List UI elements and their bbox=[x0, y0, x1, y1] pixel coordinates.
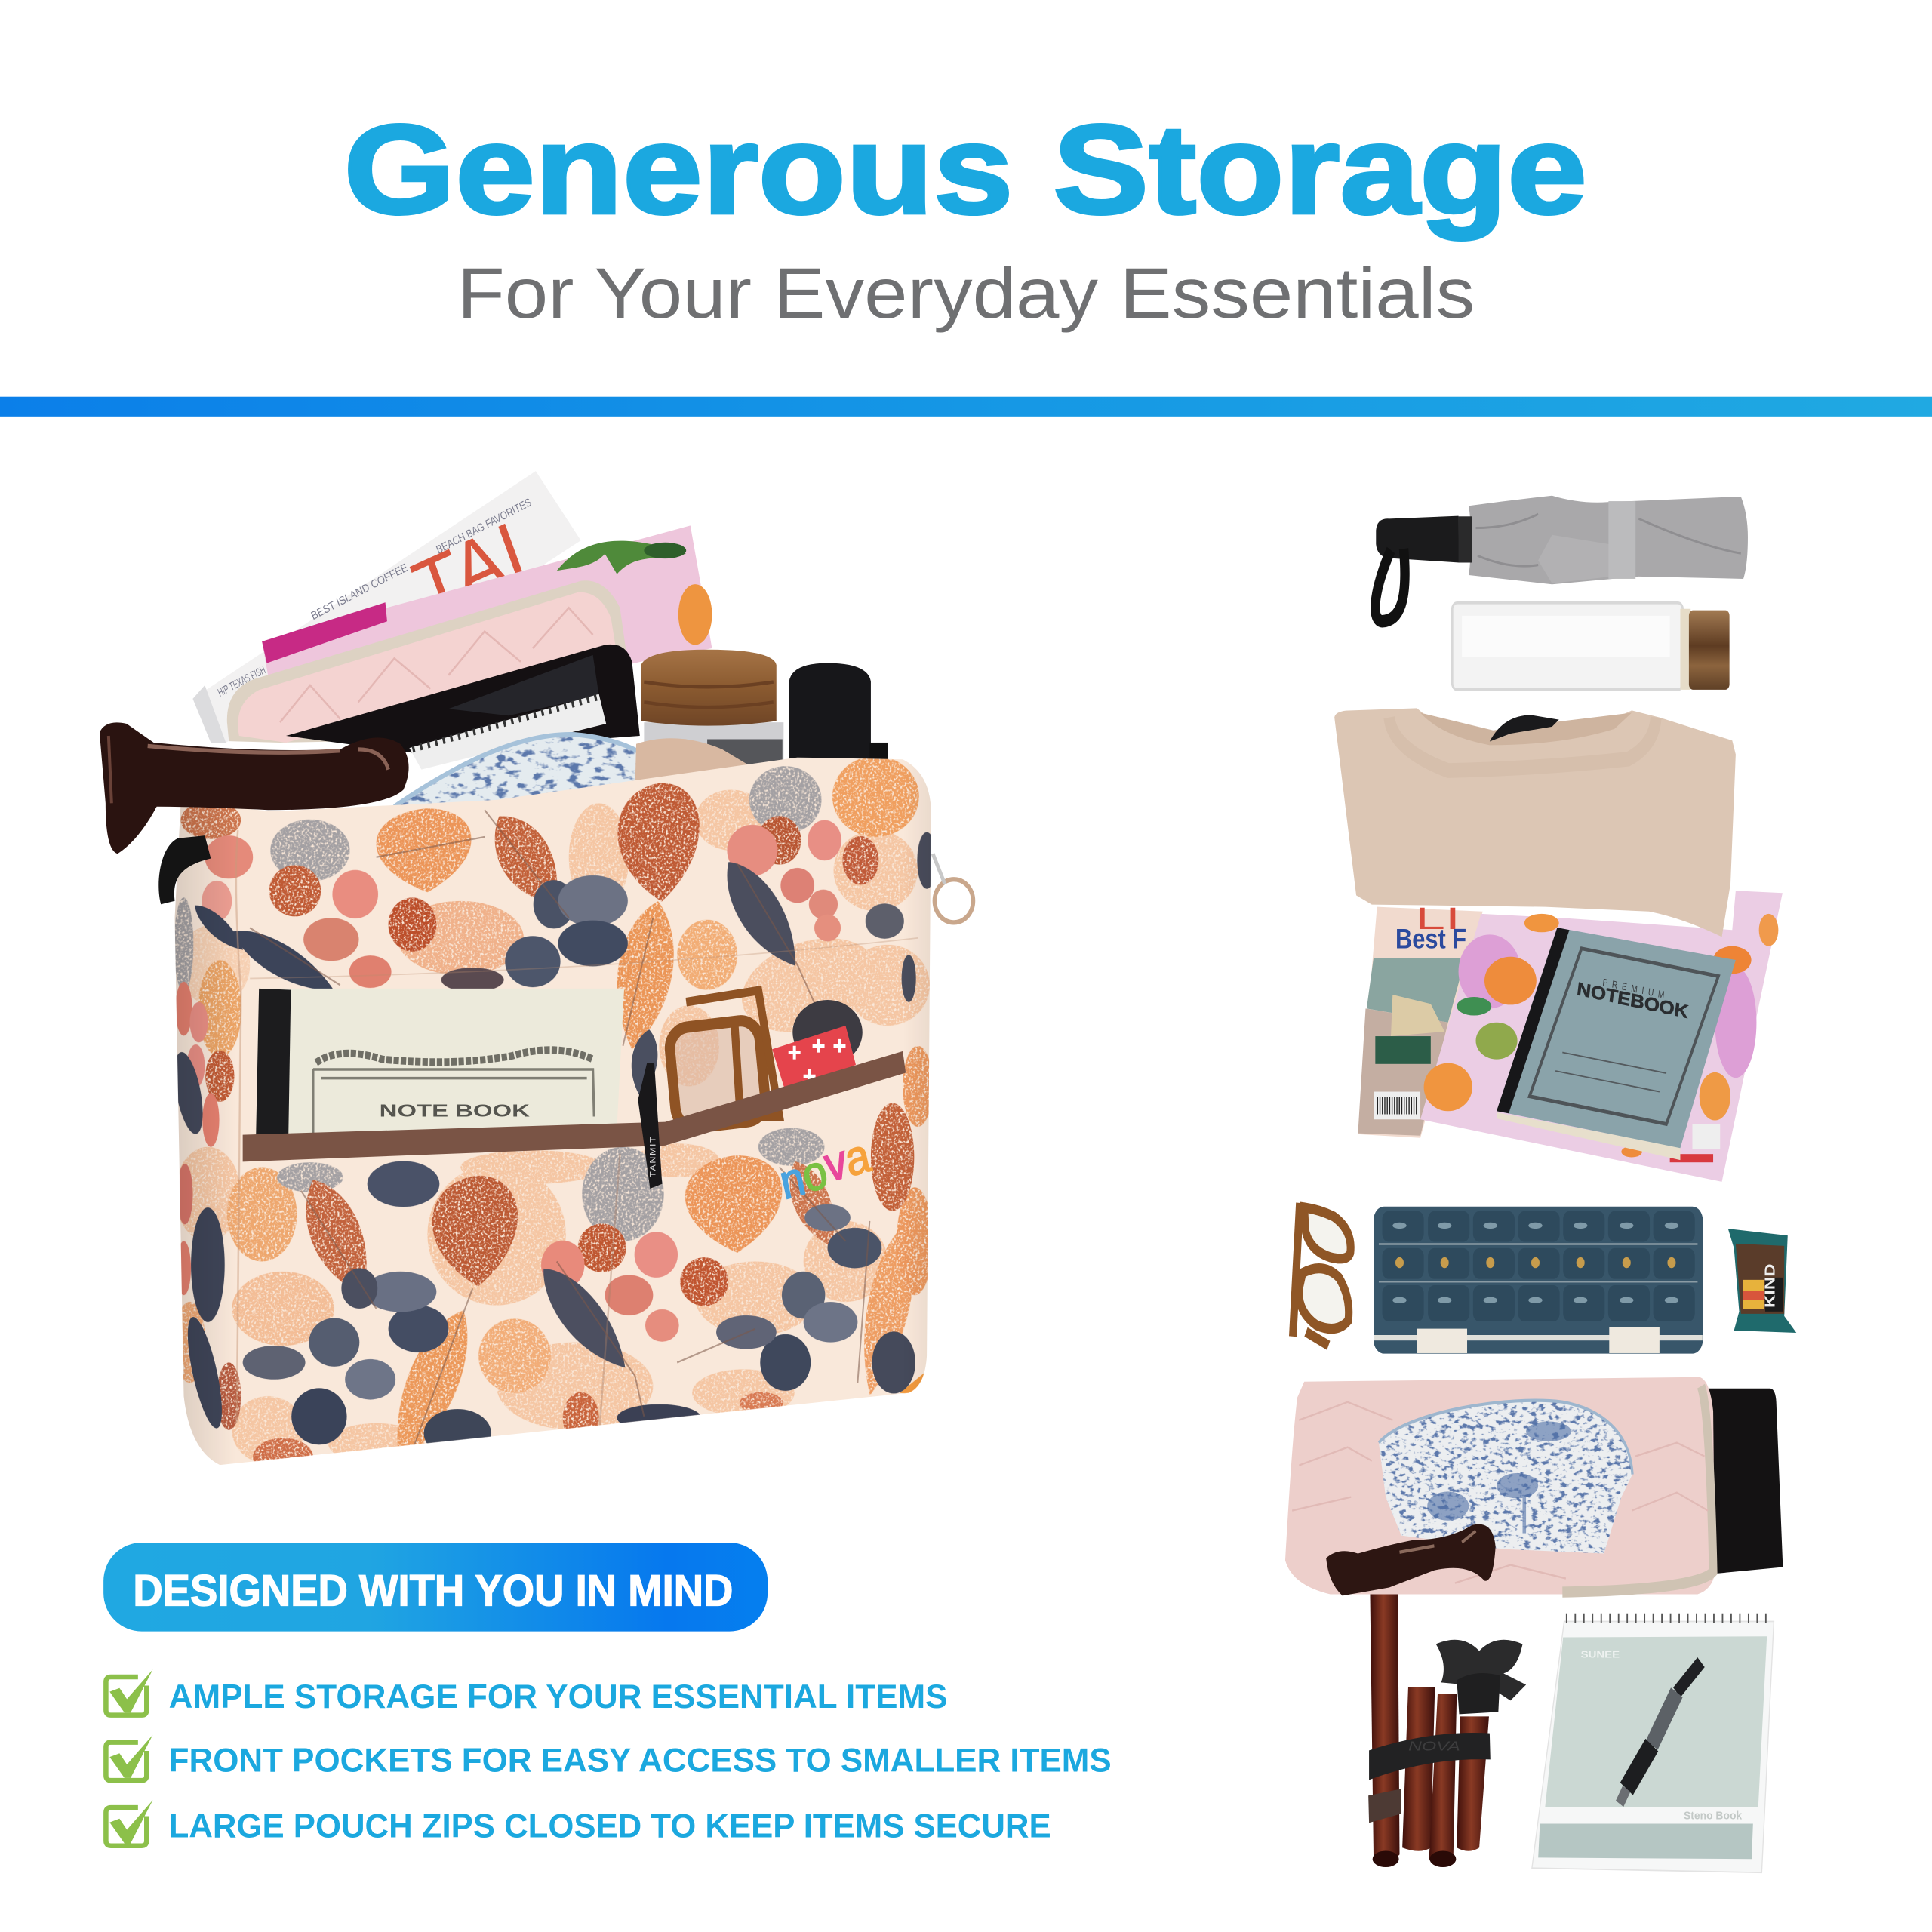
beach magazine: LI bbox=[1415, 902, 1460, 936]
pink floral magazine bbox=[262, 525, 712, 743]
toile pouch bbox=[395, 734, 672, 807]
blue premium notebook bbox=[1497, 928, 1736, 1160]
nova logo bbox=[775, 1128, 875, 1210]
glass bottle with wood lid bbox=[641, 650, 783, 777]
white magazine bbox=[192, 471, 581, 743]
floral magazine bbox=[1420, 891, 1783, 1182]
steno notepad with pen: SUNEE bbox=[1581, 1649, 1620, 1660]
umbrella, bottle, sweater, magazines and notebook bbox=[1334, 496, 1783, 1182]
glasses, pill box, snack, pouches, cane and notepad bbox=[1285, 1203, 1796, 1872]
beach magazine: Best F bbox=[1395, 924, 1466, 955]
nova logo: n bbox=[775, 1150, 810, 1210]
subtitle: For Your Everyday Essentials bbox=[457, 254, 1475, 334]
icon: check box bbox=[106, 1800, 152, 1846]
blue premium notebook: NOTEBOOK bbox=[1576, 978, 1690, 1023]
bag side ring bbox=[933, 854, 973, 922]
white magazine: BEST ISLAND COFFEE bbox=[309, 561, 410, 623]
icon: check box bbox=[106, 1669, 152, 1715]
grey umbrella bbox=[1375, 496, 1748, 621]
white magazine: BEACH BAG FAVORITES bbox=[435, 497, 534, 557]
folded umbrella handle bbox=[789, 663, 888, 770]
steno notepad with pen bbox=[1532, 1618, 1774, 1872]
KIND snack bar bbox=[1728, 1229, 1796, 1333]
cane handle bbox=[100, 722, 409, 854]
eyeglasses in pocket bbox=[668, 991, 780, 1130]
nova logo: v bbox=[820, 1134, 852, 1192]
pink leaves bbox=[175, 820, 841, 1342]
left shoulder strap bbox=[158, 835, 211, 904]
peach lace leaves bbox=[175, 789, 930, 1463]
bag body with leaf print bbox=[166, 749, 942, 1477]
product photo: packed bag bbox=[100, 471, 973, 1477]
folding cane bbox=[1326, 1524, 1526, 1867]
clear water bottle bbox=[1452, 603, 1730, 690]
quilted pouch bbox=[227, 580, 638, 743]
dark leaf behind red case bbox=[792, 1000, 863, 1065]
spiral notepad bbox=[409, 694, 606, 770]
callout pill bbox=[103, 1543, 768, 1632]
pen clipped on pocket: TANMIT bbox=[648, 1137, 657, 1177]
steno notepad with pen: Steno Book bbox=[1684, 1809, 1743, 1822]
pen clipped on pocket bbox=[638, 1063, 662, 1189]
nova logo: o bbox=[797, 1143, 832, 1203]
benefit 2: FRONT POCKETS FOR EASY ACCESS TO SMALLER ITEMS bbox=[169, 1741, 1112, 1780]
toile zip pouch bbox=[1379, 1401, 1632, 1554]
KIND snack bar: KIND bbox=[1762, 1263, 1778, 1308]
notebook in front pocket: NOTE BOOK bbox=[380, 1100, 530, 1121]
corner orange bbox=[900, 1373, 924, 1393]
header divider bar bbox=[0, 397, 1932, 417]
red case in pocket bbox=[772, 1026, 856, 1101]
nova logo: a bbox=[840, 1128, 875, 1186]
beach magazine bbox=[1358, 902, 1483, 1138]
weekly pill organizer bbox=[1374, 1207, 1703, 1354]
white magazine: HIP TEXAS FISH bbox=[217, 664, 267, 700]
navy leaf beside pen bbox=[626, 1027, 662, 1098]
title: Generous Storage bbox=[344, 98, 1587, 240]
icon: check box bbox=[106, 1735, 152, 1780]
folding cane: NOVA bbox=[1408, 1740, 1460, 1754]
blue premium notebook: PREMIUM bbox=[1602, 976, 1665, 1001]
navy leaves bbox=[169, 832, 937, 1457]
tortoise eyeglasses bbox=[1293, 1203, 1351, 1346]
tablet bbox=[286, 645, 640, 752]
benefit 1: AMPLE STORAGE FOR YOUR ESSENTIAL ITEMS bbox=[169, 1677, 948, 1715]
rust leaves bbox=[181, 783, 914, 1444]
orange leaves bbox=[174, 756, 933, 1475]
pill heading: DESIGNED WITH YOU IN MIND bbox=[133, 1566, 733, 1615]
leaf veins, seams and shading bbox=[236, 810, 918, 1450]
sweater bbox=[635, 738, 758, 803]
notebook in front pocket bbox=[256, 989, 624, 1137]
grey lace leaves bbox=[174, 766, 825, 1241]
brown pocket strap bbox=[243, 1051, 906, 1161]
white magazine: TAI bbox=[402, 504, 537, 638]
beige sweatshirt bbox=[1334, 708, 1736, 937]
pink quilted sleeve bbox=[1285, 1377, 1715, 1595]
tablet in sleeve bbox=[1705, 1389, 1783, 1574]
benefit 3: LARGE POUCH ZIPS CLOSED TO KEEP ITEMS SECURE bbox=[169, 1806, 1051, 1844]
